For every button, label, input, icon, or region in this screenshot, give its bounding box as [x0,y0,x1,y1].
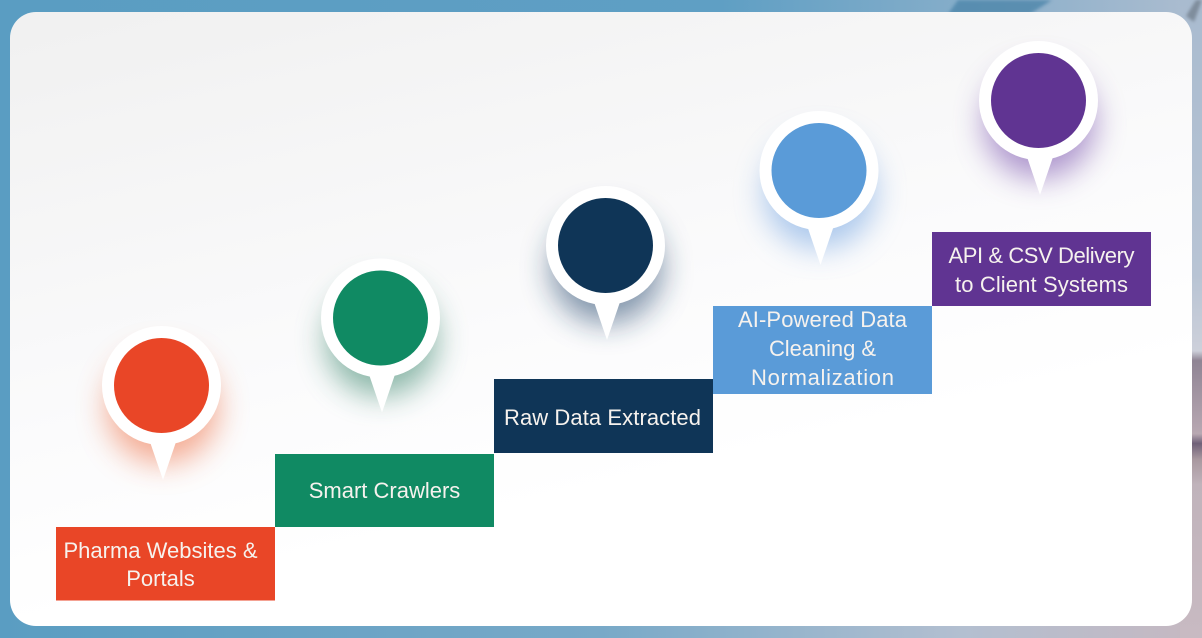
pin 2 [321,258,440,412]
step 5: API & CSV Delivery to Client Systems [932,41,1151,306]
label 5 [932,232,1151,306]
label 3 [494,379,713,453]
label 4: AI-Powered Data [738,307,908,332]
label 4: Normalization [751,365,894,390]
step 4: AI-Powered Data Cleaning & Normalization [713,111,932,394]
pin 4 [760,111,878,265]
step 3: Raw Data Extracted [494,186,713,453]
label 1: Portals [126,566,195,591]
pin 3 [546,186,665,340]
pin 5 [979,41,1098,195]
label 4 [713,306,932,394]
label 1 [56,527,275,600]
label 5: API & CSV Delivery [948,243,1134,268]
step 1: Pharma Websites & Portals [56,326,275,600]
step 2: Smart Crawlers [275,258,494,527]
label 4: Cleaning & [769,336,876,361]
label 2 [275,454,494,527]
label 1: Pharma Websites & [63,538,258,563]
label 5: to Client Systems [955,272,1128,297]
pin 1 [102,326,221,480]
label 3: Raw Data Extracted [504,405,701,430]
label 2: Smart Crawlers [309,478,460,503]
